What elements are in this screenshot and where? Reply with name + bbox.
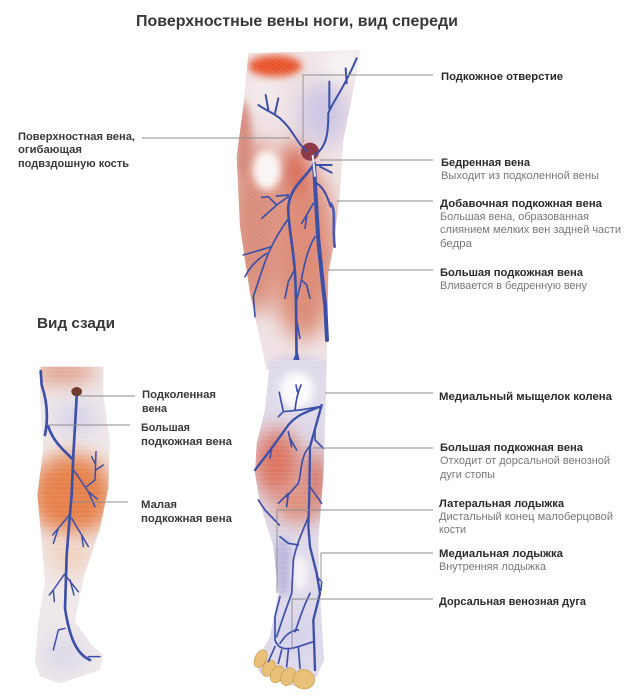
label: femoral vein: Выходит из подколенной вены	[441, 170, 599, 182]
label: circumflex iliac vein: Поверхностная вена,	[18, 131, 135, 143]
illustration: back leg	[35, 366, 110, 684]
label: popliteal vein: Подколенная	[142, 389, 216, 401]
toes	[252, 648, 316, 691]
label: accessory saphenous vein	[440, 198, 621, 250]
label: great saphenous vein, shin: Отходит от дорсальной венозной	[440, 455, 610, 467]
leader: medial condyle	[325, 392, 433, 394]
title: Поверхностные вены ноги, вид спереди	[136, 13, 458, 30]
leader: small saphenous	[73, 501, 128, 503]
leader: lateral malleolus	[277, 510, 433, 593]
label: great saphenous vein, shin: дуги стопы	[440, 469, 495, 481]
label: accessory saphenous vein: Большая вена, образованная	[440, 211, 589, 223]
leader: great saphenous vein, shin	[313, 447, 433, 449]
label: popliteal vein	[142, 389, 216, 415]
leader: great saphenous, back	[48, 424, 130, 426]
label: dorsal venous arch: Дорсальная венозная дуга	[439, 596, 587, 608]
label: great saphenous vein, thigh	[440, 267, 587, 292]
label: popliteal vein: вена	[142, 403, 168, 415]
popliteal opening	[71, 387, 82, 396]
label: lateral malleolus	[439, 498, 613, 536]
label: medial malleolus: Медиальная лодыжка	[439, 548, 564, 560]
leader: great saphenous vein, thigh	[328, 269, 433, 271]
label: circumflex iliac vein: подвздошную кость	[18, 158, 129, 170]
leader: popliteal vein	[80, 395, 135, 397]
leader: femoral vein	[320, 159, 433, 161]
label: lateral malleolus: кости	[439, 524, 466, 536]
label: saphenous opening: Подкожное отверстие	[441, 71, 563, 83]
label: lateral malleolus: Латеральная лодыжка	[439, 498, 565, 510]
label: accessory saphenous vein: бедра	[440, 238, 473, 250]
label: great saphenous, back: подкожная вена	[141, 436, 233, 448]
leader: accessory saphenous vein	[337, 200, 433, 202]
label: medial malleolus	[439, 548, 564, 573]
label: accessory saphenous vein: Добавочная подкожная вена	[440, 198, 603, 210]
label: great saphenous, back: Большая	[141, 422, 190, 434]
opening	[301, 143, 319, 161]
label: medial malleolus: Внутренняя лодыжка	[439, 561, 547, 573]
label: medial condyle: Медиальный мыщелок колена	[439, 391, 613, 403]
label: great saphenous vein, thigh: Вливается в бедренную вену	[440, 280, 587, 292]
heading: back view: Вид сзади	[37, 315, 115, 332]
label: small saphenous: Малая	[141, 499, 177, 511]
label: femoral vein	[441, 157, 599, 182]
label: great saphenous vein, thigh: Большая подкожная вена	[440, 267, 584, 279]
label: great saphenous, back	[141, 422, 233, 448]
label: great saphenous vein, shin	[440, 442, 610, 481]
label: femoral vein: Бедренная вена	[441, 157, 531, 169]
leader: circumflex iliac vein	[142, 137, 290, 139]
label: lateral malleolus: Дистальный конец малоберцовой	[439, 511, 613, 523]
illustration: front leg, thigh	[236, 50, 360, 370]
label: circumflex iliac vein: огибающая	[18, 144, 82, 156]
label: small saphenous	[141, 499, 233, 525]
leader: saphenous opening	[303, 75, 433, 143]
label: accessory saphenous vein: слиянием мелких вен задней части	[440, 224, 621, 236]
label: circumflex iliac vein	[18, 131, 135, 170]
label: great saphenous vein, shin: Большая подкожная вена	[440, 442, 584, 454]
illustration: front leg, lower leg and foot	[250, 360, 330, 693]
label: small saphenous: подкожная вена	[141, 513, 233, 525]
leader: medial malleolus	[321, 553, 433, 583]
leader: dorsal venous arch	[292, 599, 433, 650]
